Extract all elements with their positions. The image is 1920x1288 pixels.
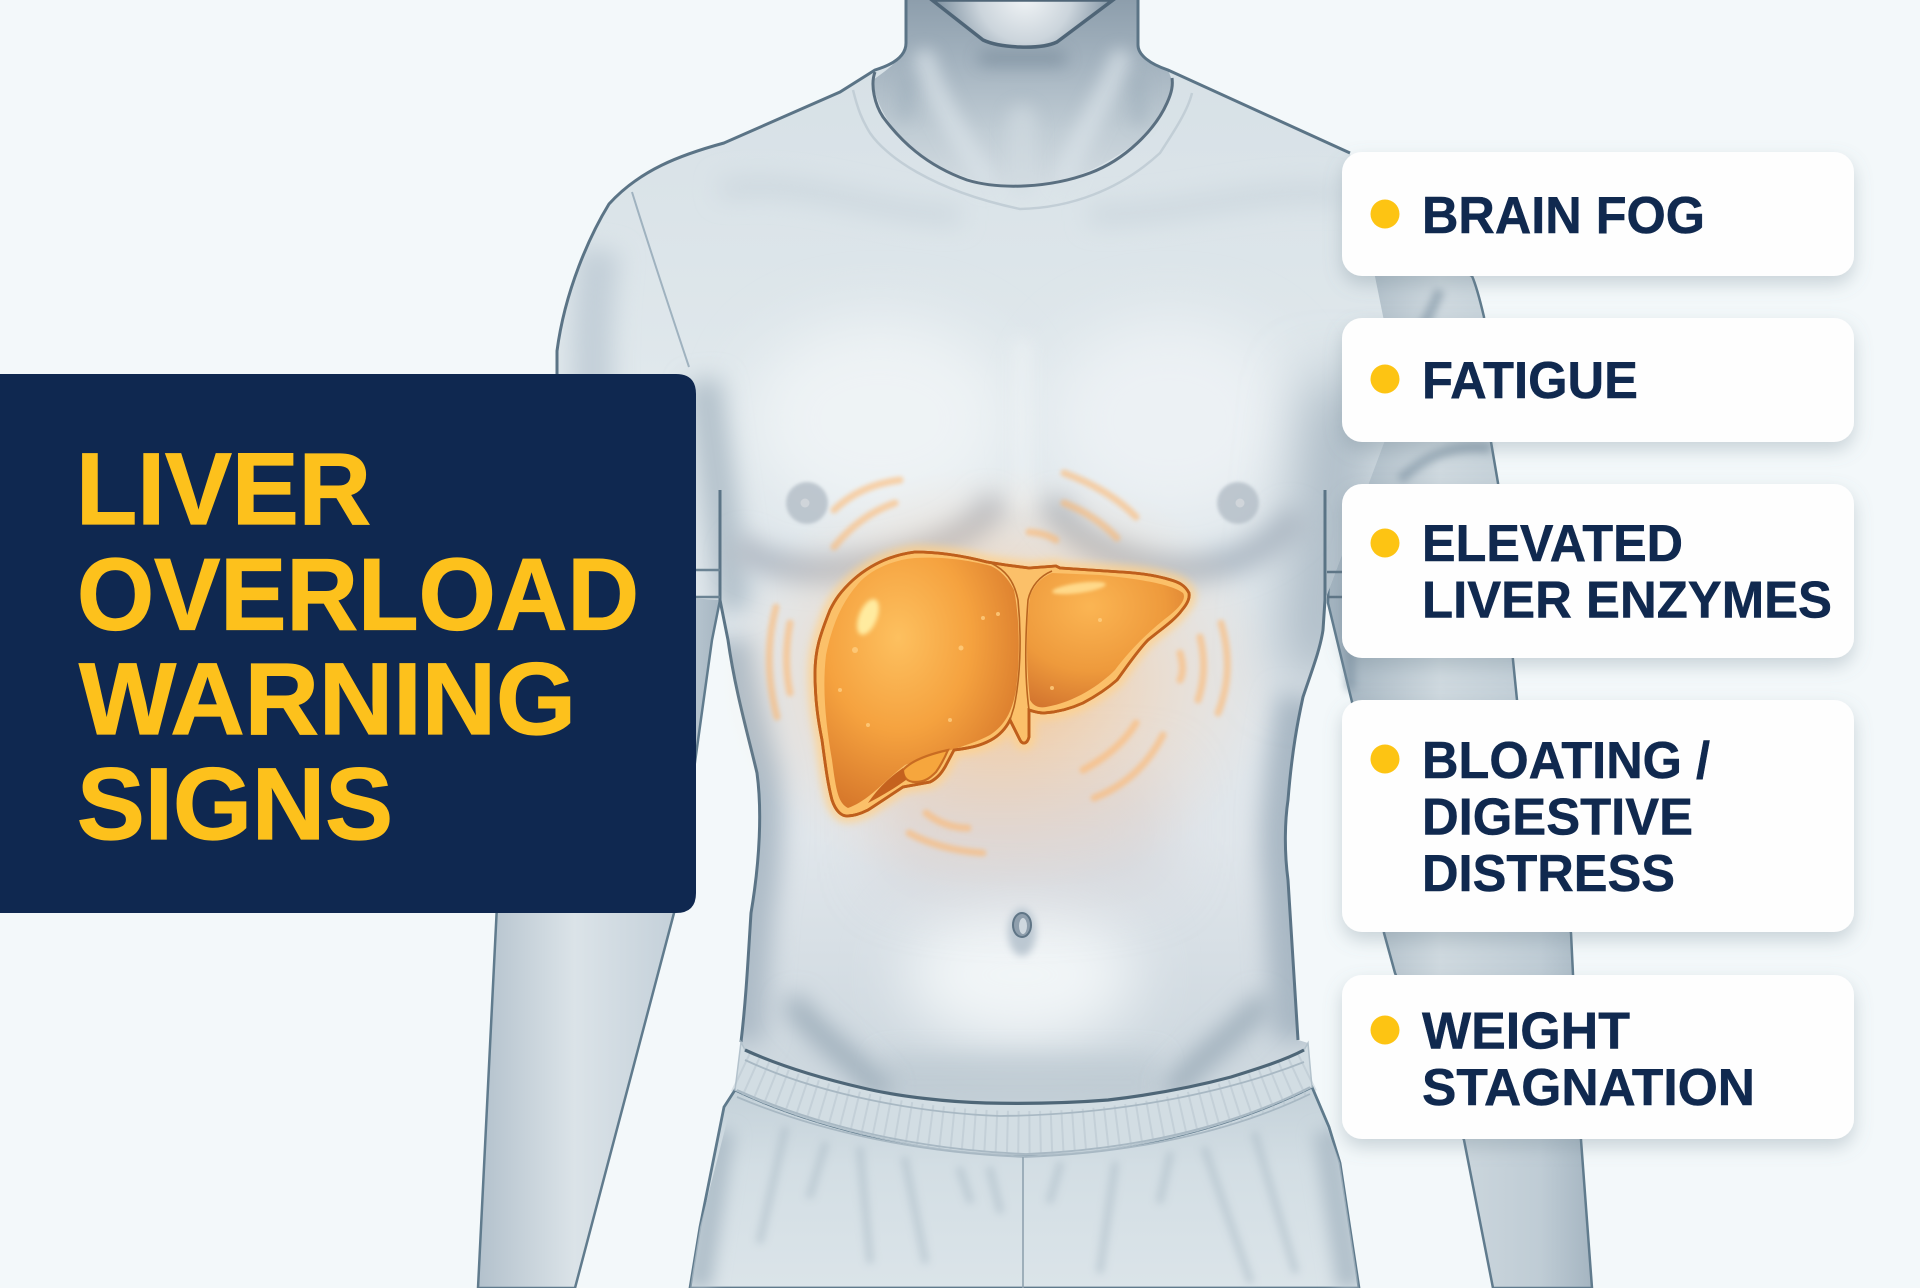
card: bloating / digestive distress bbox=[1342, 700, 1854, 932]
card: elevated liver enzymes: LIVER ENZYMES bbox=[1422, 572, 1832, 630]
belly highlight bbox=[905, 905, 1135, 1045]
card: bloating / digestive distress: DIGESTIVE bbox=[1422, 788, 1693, 846]
liver outline bbox=[815, 552, 1189, 816]
title: OVERLOAD bbox=[77, 538, 639, 652]
left arm bbox=[478, 560, 720, 1288]
side shading bbox=[728, 640, 760, 1042]
liver speckles bbox=[838, 612, 1102, 727]
card: brain fog: BRAIN FOG bbox=[1422, 187, 1705, 245]
liver bbox=[815, 552, 1189, 816]
title: LIVER bbox=[76, 432, 371, 546]
gallbladder bbox=[903, 750, 948, 782]
right lobe bbox=[1027, 573, 1184, 707]
navel bbox=[1008, 908, 1036, 956]
waistband top edge bbox=[745, 1050, 1304, 1103]
body shading bbox=[592, 187, 1345, 1110]
folds bbox=[760, 1130, 1295, 1280]
card: elevated liver enzymes bbox=[1342, 484, 1854, 658]
radiating heat arcs bbox=[769, 473, 1227, 853]
card: elevated liver enzymes: ELEVATED bbox=[1422, 515, 1683, 573]
card: bloating / digestive distress: DISTRESS bbox=[1422, 845, 1675, 903]
card: brain fog bbox=[1342, 152, 1854, 276]
title: WARNING bbox=[79, 642, 576, 756]
left lobe bbox=[824, 558, 1019, 808]
sternum line bbox=[1014, 340, 1030, 510]
shorts body bbox=[690, 1087, 1359, 1288]
chest highlights bbox=[762, 324, 998, 510]
illustration: male torso bbox=[478, 0, 1592, 1288]
liver body bbox=[815, 552, 1189, 816]
right sleeve folds bbox=[1335, 290, 1490, 690]
waistband stitch lines bbox=[737, 1060, 1310, 1157]
title background bbox=[0, 374, 696, 913]
right sleeve hem bbox=[1327, 572, 1345, 597]
pectoral shadows bbox=[735, 500, 998, 570]
waistband ribbing bbox=[740, 1070, 1310, 1132]
liver highlights bbox=[853, 596, 883, 638]
lobe division lines bbox=[991, 563, 1052, 720]
liver glow bbox=[720, 465, 1280, 895]
shirt outline bbox=[557, 0, 1350, 1042]
left sleeve hem bbox=[696, 570, 720, 597]
shoulder shade bbox=[720, 187, 1340, 215]
card: weight stagnation: WEIGHT bbox=[1422, 1002, 1630, 1060]
sleeve shade bbox=[592, 250, 600, 500]
waistband bbox=[735, 1042, 1312, 1155]
title bbox=[76, 432, 639, 861]
abdominal shading bbox=[888, 788, 1163, 898]
card: bloating / digestive distress: BLOATING / bbox=[1422, 732, 1710, 790]
shorts bbox=[690, 1042, 1359, 1288]
lower abdomen shade bbox=[889, 1052, 1156, 1102]
right arm bbox=[1328, 200, 1592, 1288]
sleeve seam bbox=[632, 192, 689, 367]
shorts side shade bbox=[698, 1130, 1350, 1288]
chin bbox=[932, 0, 1113, 47]
torso and shirt bbox=[557, 0, 1400, 1288]
collar bbox=[853, 72, 1192, 209]
card: fatigue: FATIGUE bbox=[1422, 352, 1638, 410]
neck bbox=[873, 0, 1172, 187]
neck tendons and highlights bbox=[905, 58, 1140, 180]
nipples bbox=[786, 482, 1259, 524]
panel: title bbox=[0, 374, 696, 913]
liver halo bbox=[815, 552, 1189, 816]
card: fatigue bbox=[1342, 318, 1854, 442]
card: weight stagnation: STAGNATION bbox=[1422, 1059, 1755, 1117]
centre seam bbox=[1022, 1157, 1024, 1288]
card: weight stagnation bbox=[1342, 975, 1854, 1139]
lower abdomen creases bbox=[790, 1000, 885, 1095]
gallbladder shadow bbox=[868, 768, 906, 803]
title: SIGNS bbox=[77, 747, 393, 861]
